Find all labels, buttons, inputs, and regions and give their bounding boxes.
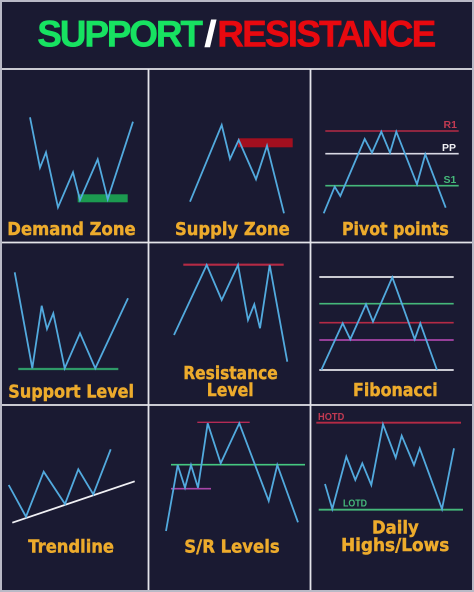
panel: resistance level [174, 265, 287, 401]
panel: supply zone [175, 125, 293, 240]
support level heading: Support Level [8, 382, 134, 403]
middle flip line [171, 464, 305, 466]
label HOTD: HOTD [318, 411, 345, 423]
panel: pivot points [324, 119, 459, 240]
panel: fibonacci [319, 277, 454, 401]
lower support line [171, 488, 211, 490]
resistance line [183, 264, 284, 266]
panel: S/R levels [166, 422, 305, 558]
fibonacci heading: Fibonacci [353, 380, 438, 401]
supply zone price line [190, 125, 284, 213]
supply zone heading: Supply Zone [175, 219, 290, 240]
daily highs/lows heading [341, 517, 449, 556]
title [37, 14, 436, 55]
trendline heading: Trendline [28, 537, 114, 558]
pivot point line [325, 153, 459, 155]
resistance level heading [183, 363, 278, 401]
resistance price line [174, 265, 287, 362]
resistance level heading: Level [207, 380, 254, 401]
S/R price line [166, 423, 298, 531]
fibonacci levels [319, 277, 454, 370]
resistance 1 line [325, 130, 459, 132]
supply zone rectangle [238, 138, 293, 147]
fibonacci price line [321, 277, 437, 370]
trendline price line [9, 449, 111, 517]
resistance level heading: Resistance [183, 363, 278, 384]
support price line [15, 272, 128, 368]
title: SUPPORT [37, 14, 203, 55]
low of the day line [319, 509, 463, 511]
panel: trendline [9, 449, 135, 558]
pivot points heading: Pivot points [342, 219, 449, 240]
daily highs/lows heading: Daily [372, 517, 419, 538]
panel: support level [8, 272, 134, 403]
daily price line [325, 424, 454, 509]
demand zone price line [30, 117, 133, 207]
support 1 line [325, 185, 459, 187]
label R1: R1 [444, 119, 457, 131]
upper resistance line [197, 421, 250, 423]
high of the day line [316, 422, 461, 424]
label S1: S1 [444, 174, 457, 186]
label LOTD: LOTD [343, 498, 367, 510]
pivot price line [324, 132, 446, 213]
title: RESISTANCE [217, 14, 436, 55]
title: / [204, 14, 217, 55]
label PP: PP [442, 142, 456, 154]
panel: demand zone [7, 117, 136, 240]
panel: daily highs and lows [316, 411, 463, 556]
S/R levels heading: S/R Levels [184, 537, 280, 558]
demand zone heading: Demand Zone [7, 219, 136, 240]
rising trendline [12, 481, 135, 523]
daily highs/lows heading: Highs/Lows [341, 535, 449, 556]
support line [18, 368, 118, 370]
demand zone rectangle [78, 194, 128, 202]
